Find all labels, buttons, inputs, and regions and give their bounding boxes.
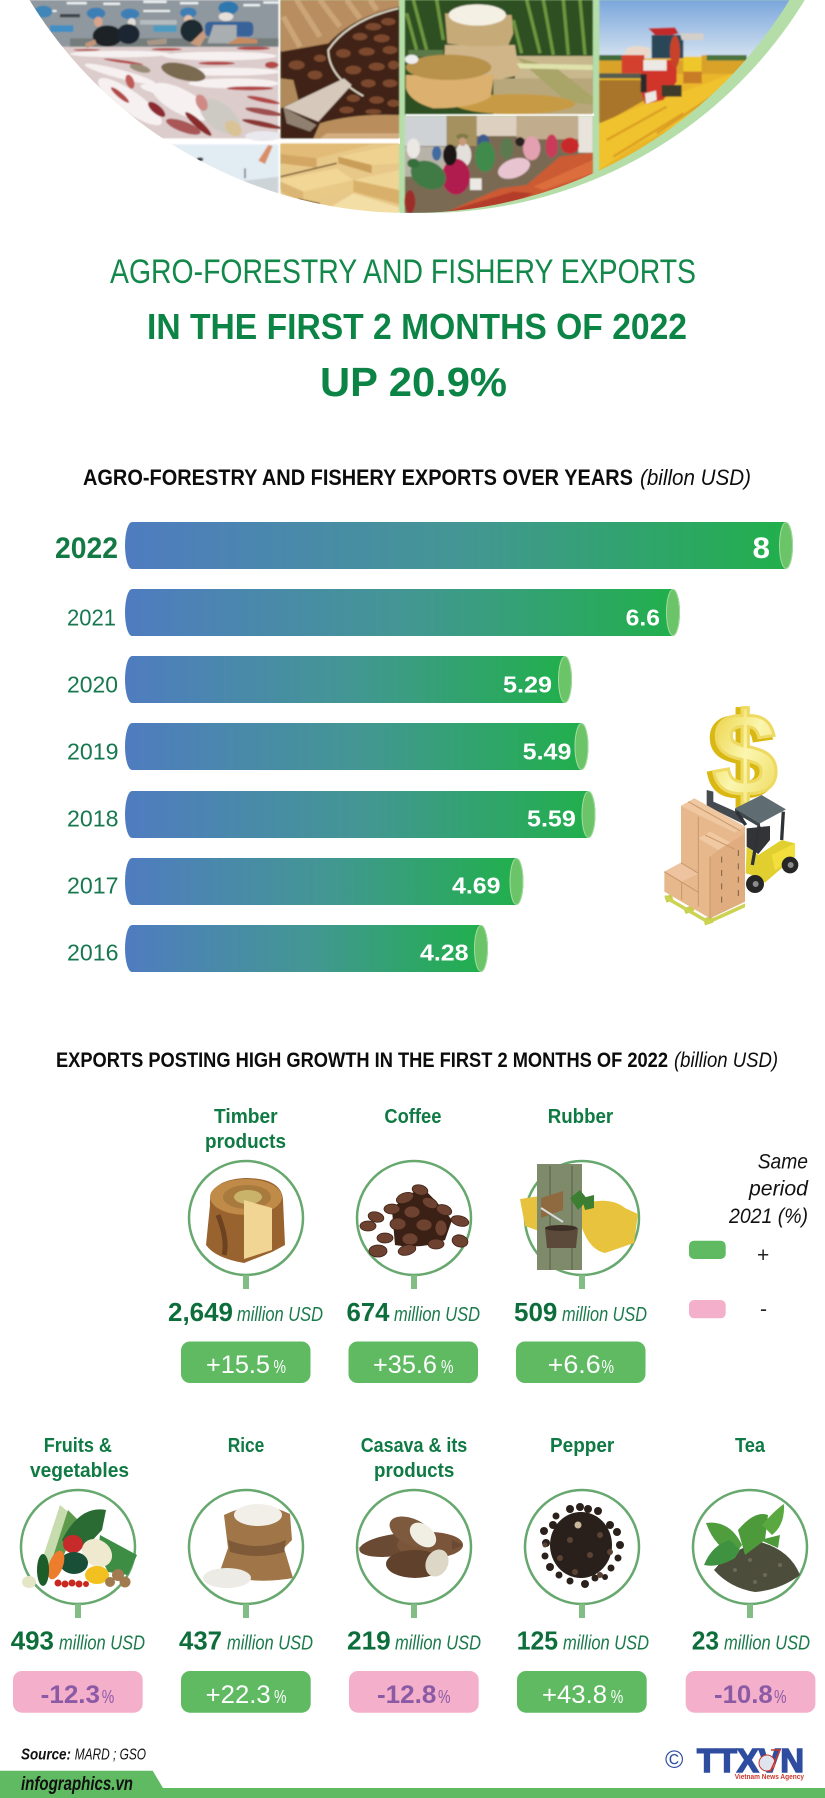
legend: increase [689, 1241, 769, 1267]
change badge [349, 1671, 479, 1713]
legend: same period 2021 [689, 1150, 809, 1321]
value: 219 [347, 1625, 391, 1655]
change badge: % [102, 1687, 114, 1707]
name [205, 1106, 286, 1153]
name: Casava & its [361, 1435, 467, 1457]
change badge: % [611, 1687, 623, 1707]
photo: laboratory [172, 144, 279, 194]
bar 2018: 5.59 [527, 806, 576, 832]
icon: dollar sign: $ [712, 689, 778, 821]
heading: exports over years: AGRO-FORESTRY AND FISHERY EXPORTS OVER YEARS [83, 465, 633, 490]
change badge: +15.5 [206, 1351, 270, 1379]
name: Tea [735, 1435, 766, 1457]
value [347, 1625, 481, 1655]
title line 1: AGRO-FORESTRY AND FISHERY EXPORTS [110, 253, 696, 291]
value [514, 1297, 647, 1327]
name: Pepper [550, 1435, 614, 1457]
value [692, 1625, 810, 1655]
photo: rice harvester [598, 0, 790, 171]
name: vegetables [30, 1460, 129, 1482]
copyright symbol: © [665, 1746, 684, 1774]
value: 674 [346, 1297, 390, 1327]
footer site name: infographics.vn [21, 1774, 133, 1795]
bar 2020: 2020 [67, 672, 118, 698]
change badge [517, 1671, 647, 1713]
card: tea [686, 1435, 815, 1713]
value [11, 1625, 145, 1655]
value [168, 1297, 323, 1327]
bar 2019 [67, 723, 589, 770]
value: 125 [517, 1625, 558, 1655]
bar 2022 [55, 522, 793, 569]
card: pepper [517, 1435, 649, 1713]
change badge: % [602, 1357, 614, 1377]
value: million USD [395, 1632, 481, 1654]
name [361, 1435, 467, 1482]
change badge: % [274, 1357, 286, 1377]
change badge: % [438, 1687, 450, 1707]
change badge [686, 1671, 815, 1713]
change badge [181, 1342, 310, 1383]
photo: rice sack [405, 0, 593, 114]
card: fruits and vegetables [11, 1435, 145, 1713]
change badge [181, 1671, 311, 1713]
heading: exports posting high growth: (billion USD) [674, 1049, 778, 1072]
card: casava [347, 1435, 481, 1713]
value: 493 [11, 1625, 54, 1655]
value: million USD [563, 1632, 649, 1654]
bar 2021: 2021 [67, 605, 116, 631]
change badge: -12.8 [377, 1681, 436, 1709]
title block [110, 253, 696, 405]
change badge: % [274, 1687, 286, 1707]
header photo collage [0, 0, 825, 214]
title line 3: UP 20.9% [320, 359, 507, 405]
name [30, 1435, 129, 1482]
change badge: +35.6 [373, 1351, 437, 1379]
name: products [374, 1460, 454, 1482]
name: Coffee [384, 1106, 441, 1128]
source note: MARD ; GSO [75, 1746, 146, 1764]
bar 2018: 2018 [67, 806, 118, 832]
bar 2020: 5.29 [503, 672, 552, 698]
bar 2016: 2016 [67, 940, 118, 966]
name: Timber [214, 1106, 278, 1128]
bar 2017: 2017 [67, 872, 118, 898]
card: coffee [346, 1106, 480, 1383]
value [179, 1625, 313, 1655]
change badge: +43.8 [542, 1681, 607, 1709]
legend title: Same [758, 1150, 808, 1174]
bar 2016 [67, 925, 488, 972]
value: million USD [237, 1304, 323, 1326]
source note: Source: [21, 1746, 71, 1764]
legend: decrease: - [760, 1298, 767, 1321]
change badge: % [774, 1687, 786, 1707]
bar 2017: 4.69 [452, 872, 500, 898]
legend title: 2021 (%) [728, 1205, 808, 1228]
footer band [0, 1771, 825, 1798]
photo: timber planks [281, 143, 399, 214]
icon: dollar sign: $ [708, 691, 774, 823]
bar 2022: 8 [752, 532, 770, 565]
icon: vegetables [21, 1490, 137, 1618]
icon: forklift with dollar sign [664, 689, 798, 925]
value: 23 [692, 1625, 719, 1655]
change badge: +22.3 [206, 1681, 271, 1709]
card: rubber [514, 1106, 647, 1383]
value: million USD [227, 1632, 313, 1654]
change badge [13, 1671, 143, 1713]
name: Rubber [548, 1106, 613, 1128]
name: Fruits & [44, 1435, 112, 1457]
icon: rubber tree [520, 1161, 639, 1289]
icon: tea leaves [693, 1490, 807, 1618]
value [517, 1625, 649, 1655]
change badge [348, 1342, 478, 1383]
icon: globe [759, 1750, 780, 1772]
change badge: -10.8 [714, 1681, 773, 1709]
photo: fish processing [20, 0, 282, 141]
value: 509 [514, 1297, 557, 1327]
icon: rice sack [189, 1490, 303, 1618]
bar 2016: 4.28 [420, 940, 469, 966]
bar 2022: 2022 [55, 532, 118, 565]
legend: decrease [689, 1298, 767, 1321]
name: Rice [228, 1435, 264, 1457]
change badge: -12.3 [41, 1681, 100, 1709]
bar 2019: 5.49 [523, 738, 571, 764]
bar 2018 [67, 791, 596, 838]
name: products [205, 1131, 286, 1153]
agency name: Vietnam News Agency [735, 1772, 805, 1781]
value: million USD [562, 1304, 647, 1326]
legend title [728, 1150, 809, 1228]
heading: exports over years: (billon USD) [640, 465, 751, 490]
agency mark: TTXVN [697, 1742, 804, 1779]
change badge [516, 1342, 646, 1383]
change badge: % [441, 1357, 454, 1377]
legend: increase: + [757, 1244, 769, 1267]
icon: pepper corns [525, 1490, 639, 1618]
card: timber products [168, 1106, 323, 1383]
icon: casava roots [357, 1490, 471, 1618]
bar 2020 [67, 656, 572, 703]
value [346, 1297, 480, 1327]
legend title: period [748, 1178, 809, 1201]
value: 437 [179, 1625, 222, 1655]
logo: TTXVN Vietnam News Agency [665, 1742, 805, 1781]
card: rice [179, 1435, 313, 1713]
icon: timber stump [189, 1161, 303, 1289]
value: million USD [59, 1632, 145, 1654]
bar 2021: 6.6 [626, 605, 660, 631]
change badge: +6.6 [548, 1351, 601, 1379]
icon: forklift [664, 790, 798, 925]
bar 2017 [67, 858, 524, 905]
bar chart: exports by year [55, 522, 793, 972]
photo: coffee scoop [281, 0, 399, 138]
value: 2,649 [168, 1297, 233, 1327]
icon: coffee beans [357, 1161, 471, 1289]
bar 2019: 2019 [67, 738, 118, 764]
title line 2: IN THE FIRST 2 MONTHS OF 2022 [147, 306, 687, 347]
bar 2021 [67, 589, 680, 636]
heading: exports posting high growth: EXPORTS POSTING HIGH GROWTH IN THE FIRST 2 MONTHS OF 2022 [56, 1049, 668, 1072]
photo: lychee market [405, 116, 593, 213]
value: million USD [394, 1304, 480, 1326]
